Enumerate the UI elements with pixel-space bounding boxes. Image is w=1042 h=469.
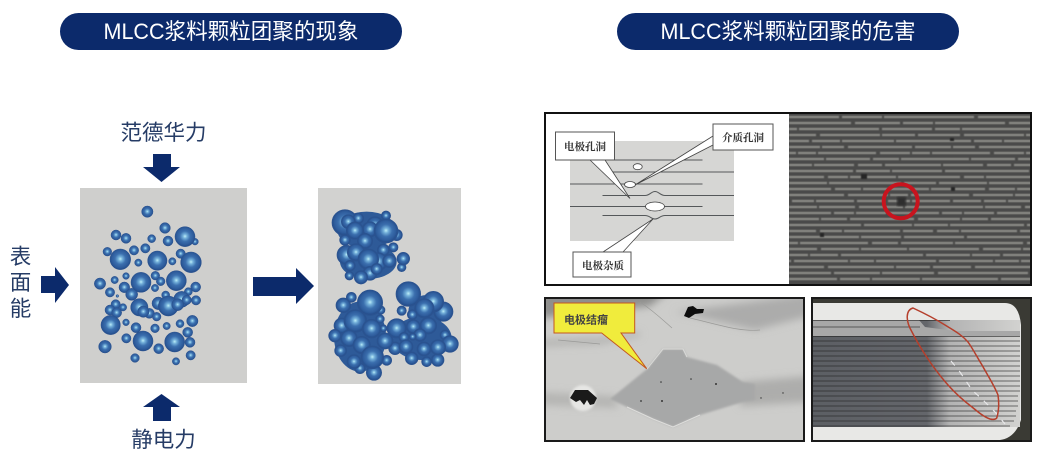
dark defect spot [897,197,906,206]
label: surface energy: 表 [10,245,31,269]
right title pill [617,13,959,50]
panel: layer micrograph with red circle [789,114,1031,284]
panel: defect schematic [545,113,789,285]
callout: electrode nodule [554,303,647,369]
label: surface energy: 面 [10,271,31,295]
label: van der Waals force: 范德华力 [120,121,207,145]
label: surface energy [10,245,31,321]
black pore: top [684,306,704,318]
callout: electrode impurity: 电极杂质 [582,259,624,272]
black pore: left [570,385,597,411]
voids [624,164,664,211]
callout: dielectric void: 介质孔洞 [722,131,764,144]
panel: dispersed particles [80,188,247,383]
callout: electrode void: 电极孔洞 [564,140,606,153]
arrow: right into dispersed panel [41,267,69,303]
callout: electrode void [556,132,630,198]
arrow: up [143,394,180,421]
label: surface energy: 能 [10,297,31,321]
red circle marker [884,184,918,218]
panel: electrode nodule micrograph [540,290,810,441]
left title pill: MLCC浆料颗粒团聚的现象 [104,19,358,44]
arrow: dispersed to agglomerated [253,268,314,304]
callout: electrode impurity [573,219,653,277]
scattered dark pores [820,138,955,237]
callout: dielectric void [635,124,773,185]
left title pill [60,13,402,50]
label: electrostatic force: 静电力 [131,428,196,452]
panel: agglomerated particles [318,188,461,384]
callout: electrode nodule: 电极结瘤 [564,312,608,326]
right title pill: MLCC浆料颗粒团聚的危害 [660,19,916,44]
nodule specks [640,378,784,402]
panel: cracked layers photo with red outline [812,298,1031,441]
red outline [907,308,999,419]
arrow: down [143,154,180,182]
frame: defect schematic and micrograph [545,113,1031,285]
